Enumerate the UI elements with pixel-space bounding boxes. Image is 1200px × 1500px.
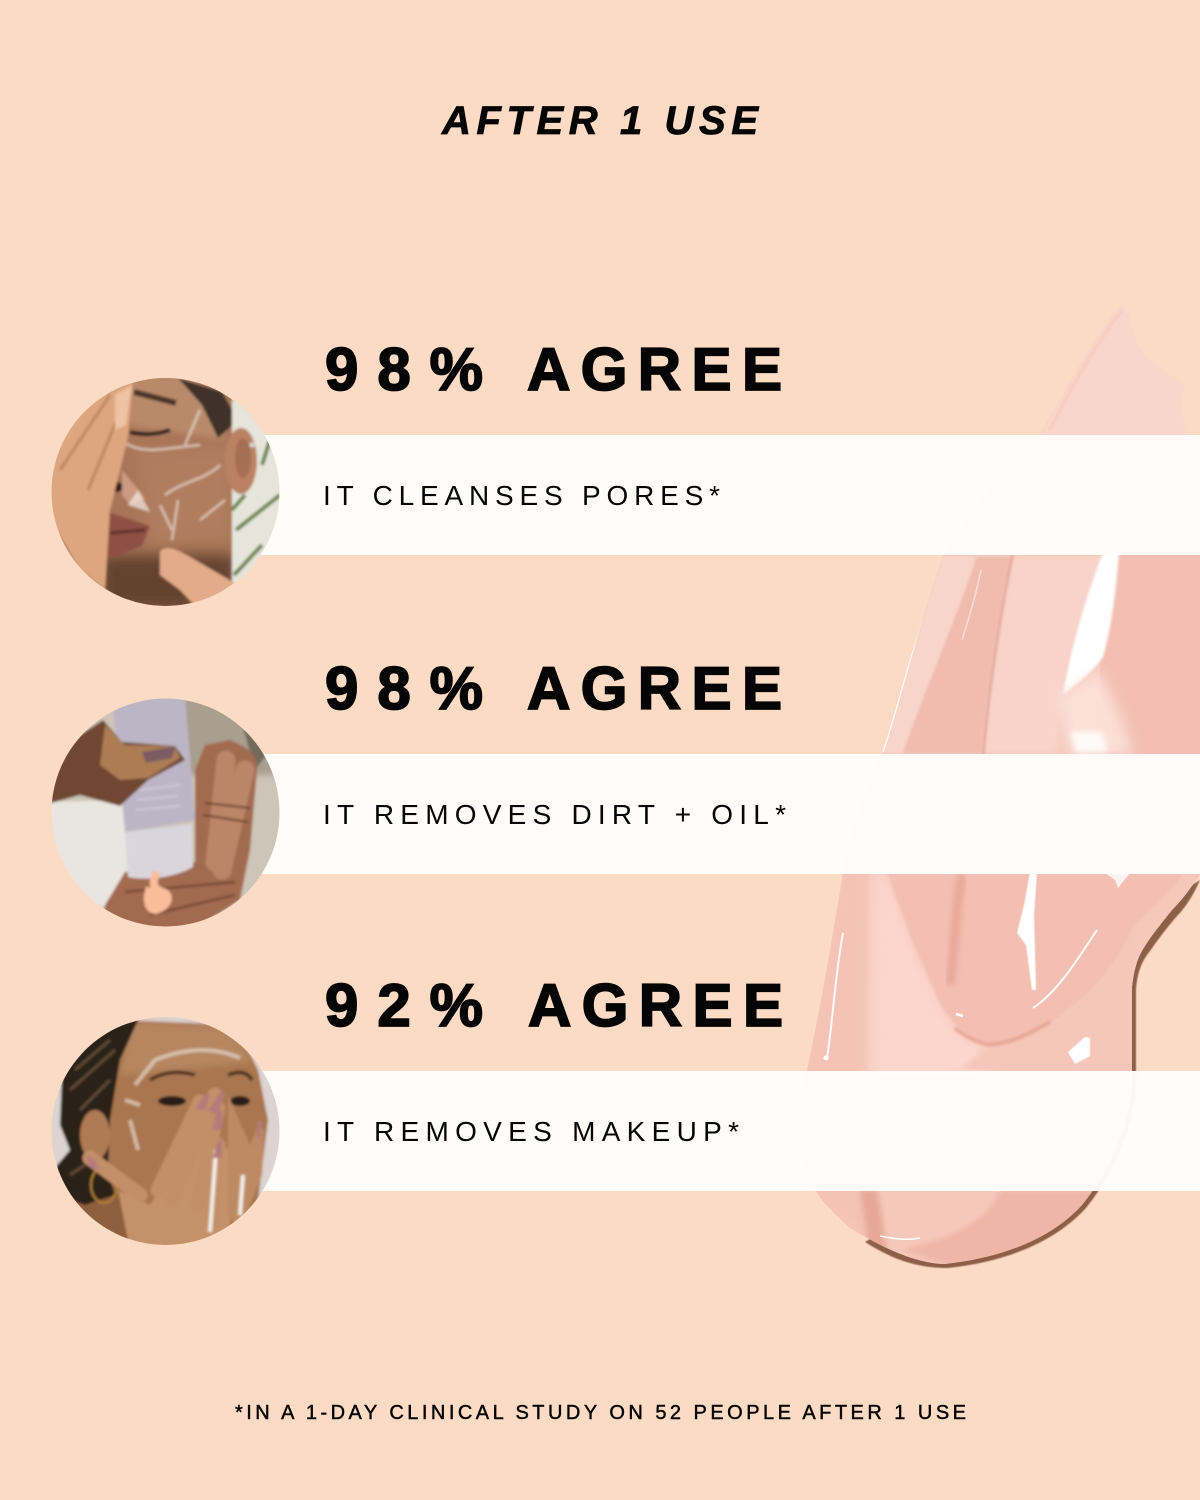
wall top — [184, 700, 274, 778]
light left lobe — [870, 876, 984, 1071]
nose — [111, 482, 123, 492]
tube — [112, 696, 195, 832]
stat 2: 98% agree: AGREE — [527, 655, 782, 722]
light lobe fades through band — [885, 754, 980, 880]
pink strip — [903, 557, 1013, 753]
ear — [80, 1110, 110, 1160]
stat 2: 98% agree — [325, 655, 782, 722]
stat 3: 92% agree — [325, 972, 783, 1039]
left white surface — [52, 799, 128, 908]
stat 2: 98% agree: 98% — [325, 655, 483, 722]
label 1: cleanses pores: IT CLEANSES PORES* — [323, 480, 720, 511]
ear — [225, 428, 257, 494]
band 3 — [260, 1071, 1200, 1191]
light lobe — [983, 557, 1104, 753]
hair — [178, 378, 238, 438]
stat 1: 98% agree: AGREE — [527, 336, 782, 403]
nail — [142, 746, 176, 763]
photo: woman cleansing face — [50, 1015, 282, 1250]
cream squeeze — [148, 872, 168, 910]
background plants — [232, 400, 282, 590]
other hand — [228, 1095, 264, 1230]
lower finger — [160, 548, 238, 606]
shadow under swatch — [865, 880, 1200, 1268]
pale left fold — [882, 557, 977, 753]
forehead — [128, 376, 225, 440]
stat 3: 92% agree: AGREE — [528, 972, 783, 1039]
tip — [1038, 303, 1187, 440]
nails — [86, 1090, 262, 1170]
tube cap — [125, 824, 193, 879]
label 2: removes dirt and oil: IT REMOVES DIRT + OIL* — [323, 799, 786, 830]
eyebrow and eye — [134, 392, 176, 403]
V fold — [950, 875, 962, 985]
mid highlight — [1017, 872, 1037, 990]
hair — [53, 1016, 140, 1205]
photo: man cleansing face — [48, 376, 282, 610]
inside U shape — [887, 873, 1183, 1043]
spot highlight — [1068, 1037, 1090, 1064]
lower body shading — [906, 1191, 1092, 1264]
top highlight — [1063, 552, 1119, 695]
U bottom crease — [955, 1022, 1050, 1044]
heading: after 1 use: AFTER 1 USE — [441, 99, 759, 143]
neck — [60, 1185, 140, 1250]
footnote: *IN A 1-DAY CLINICAL STUDY ON 52 PEOPLE AFTER 1 USE — [235, 1402, 966, 1424]
lips — [106, 512, 150, 560]
label 3: removes makeup: IT REMOVES MAKEUP* — [323, 1116, 739, 1147]
dark crease upper — [983, 552, 1013, 758]
cheek — [162, 462, 216, 529]
brows and eyes — [150, 1072, 252, 1080]
face — [100, 1020, 268, 1247]
earring — [91, 1167, 117, 1203]
left streak — [827, 933, 843, 1058]
forehead — [120, 1022, 252, 1075]
hand — [48, 381, 133, 590]
fingers — [90, 1095, 218, 1225]
outer left strip — [805, 873, 873, 1230]
stat 1: 98% agree: 98% — [325, 336, 483, 403]
gloss line — [1033, 930, 1097, 1008]
hand palm — [118, 1140, 235, 1250]
edge line — [882, 614, 924, 752]
receiving hand — [100, 740, 257, 932]
right area — [1100, 555, 1200, 874]
stat 3: 92% agree: 92% — [325, 972, 483, 1039]
photo: cleanser tube squeezed on hand — [40, 696, 282, 932]
band 2 — [260, 754, 1200, 874]
fingers — [215, 760, 245, 870]
stat 1: 98% agree — [325, 336, 782, 403]
band 1 — [260, 435, 1200, 555]
cream swatch — [780, 290, 1200, 1280]
chin — [100, 555, 235, 610]
lower-right body — [867, 873, 1200, 1265]
thumb hand — [40, 720, 185, 806]
soap — [125, 1050, 240, 1150]
soap streaks — [125, 410, 225, 540]
